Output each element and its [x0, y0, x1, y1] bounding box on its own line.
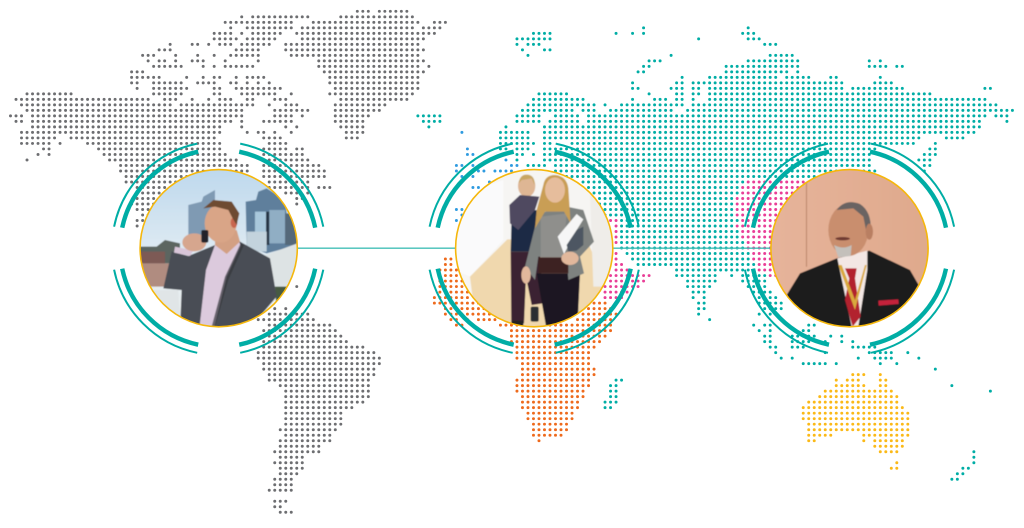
ring arcs 1: [114, 144, 323, 353]
ring arcs 3: [745, 144, 954, 353]
portrait 1: man on phone with rings: [114, 144, 323, 353]
photo: smiling man in suit with red tie: [772, 170, 928, 326]
Americas and Greenland dots: [11, 11, 446, 512]
Eurasia and islands dots: [418, 28, 1013, 479]
Africa dots: [434, 259, 617, 441]
gold ring 2: [456, 170, 613, 327]
Europe dots: [456, 132, 518, 220]
photo: man on phone in front of city skyline: [137, 167, 300, 330]
gold ring 3: [771, 170, 928, 327]
ring arcs 2: [430, 144, 639, 353]
Australia dots: [803, 375, 908, 468]
connector line between portraits: [297, 247, 771, 249]
photo: two women walking in corridor: [453, 167, 617, 330]
portrait 2: two women in corridor with rings: [430, 144, 639, 353]
Middle East and South Asia dots: [605, 182, 831, 298]
portrait 3: smiling man in suit with rings: [745, 144, 954, 353]
gold ring 1: [140, 170, 297, 327]
